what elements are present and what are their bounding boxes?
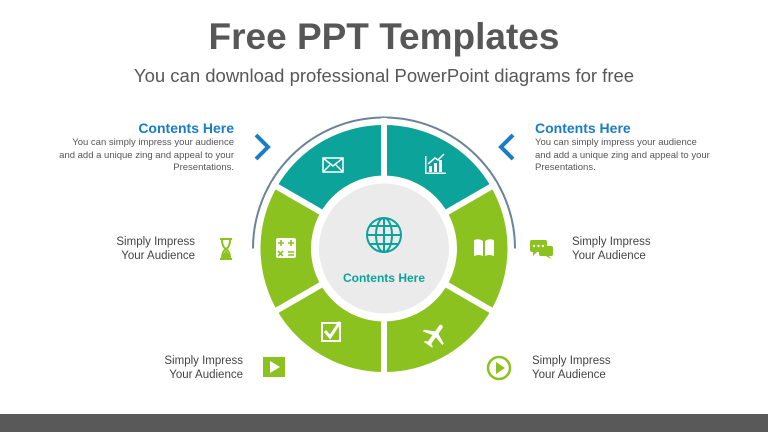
text: left bottom: Your Audience — [169, 369, 243, 381]
text block: top right: You can simply impress your audience and add a unique zing and appeal to your Presentations. — [535, 137, 710, 173]
text: left middle: Your Audience — [121, 250, 195, 262]
center circle — [319, 184, 449, 314]
icon: mail — [323, 158, 343, 172]
text: left bottom — [164, 355, 243, 381]
teal top segments — [277, 125, 491, 212]
text block: top left: Contents Here — [138, 120, 234, 136]
text: right bottom: Simply Impress — [532, 355, 611, 367]
text: left middle: Simply Impress — [116, 236, 195, 248]
icon: chat — [530, 240, 553, 259]
text block: top left — [59, 120, 234, 173]
text: right bottom — [532, 355, 611, 381]
text block: top right — [535, 120, 710, 173]
text block: top right: Contents Here — [535, 120, 631, 136]
text: right middle — [572, 236, 651, 262]
text: right bottom: Your Audience — [532, 369, 606, 381]
center label: Contents Here — [343, 271, 425, 285]
subtitle: You can download professional PowerPoint diagrams for free — [134, 65, 634, 86]
text: left middle — [116, 236, 195, 262]
icon: film play — [263, 357, 285, 377]
icon: plane — [418, 318, 452, 352]
chevron left — [256, 135, 268, 159]
bottom bar — [0, 414, 768, 432]
text block: top left: You can simply impress your audience and add a unique zing and appeal to your Presentations. — [59, 137, 234, 173]
green ring — [286, 150, 482, 347]
arc outline — [253, 118, 515, 248]
icon: hourglass — [220, 239, 232, 259]
icon: calculator — [276, 238, 296, 258]
text: right middle: Your Audience — [572, 250, 646, 262]
icon: play circle — [488, 357, 510, 379]
title: Free PPT Templates — [209, 16, 559, 57]
text: left bottom: Simply Impress — [164, 355, 243, 367]
icon: globe — [367, 218, 401, 252]
icon: check — [322, 322, 340, 341]
icon: chart — [425, 154, 446, 174]
icon: book — [474, 239, 494, 256]
text: right middle: Simply Impress — [572, 236, 651, 248]
chevron right — [501, 135, 513, 159]
